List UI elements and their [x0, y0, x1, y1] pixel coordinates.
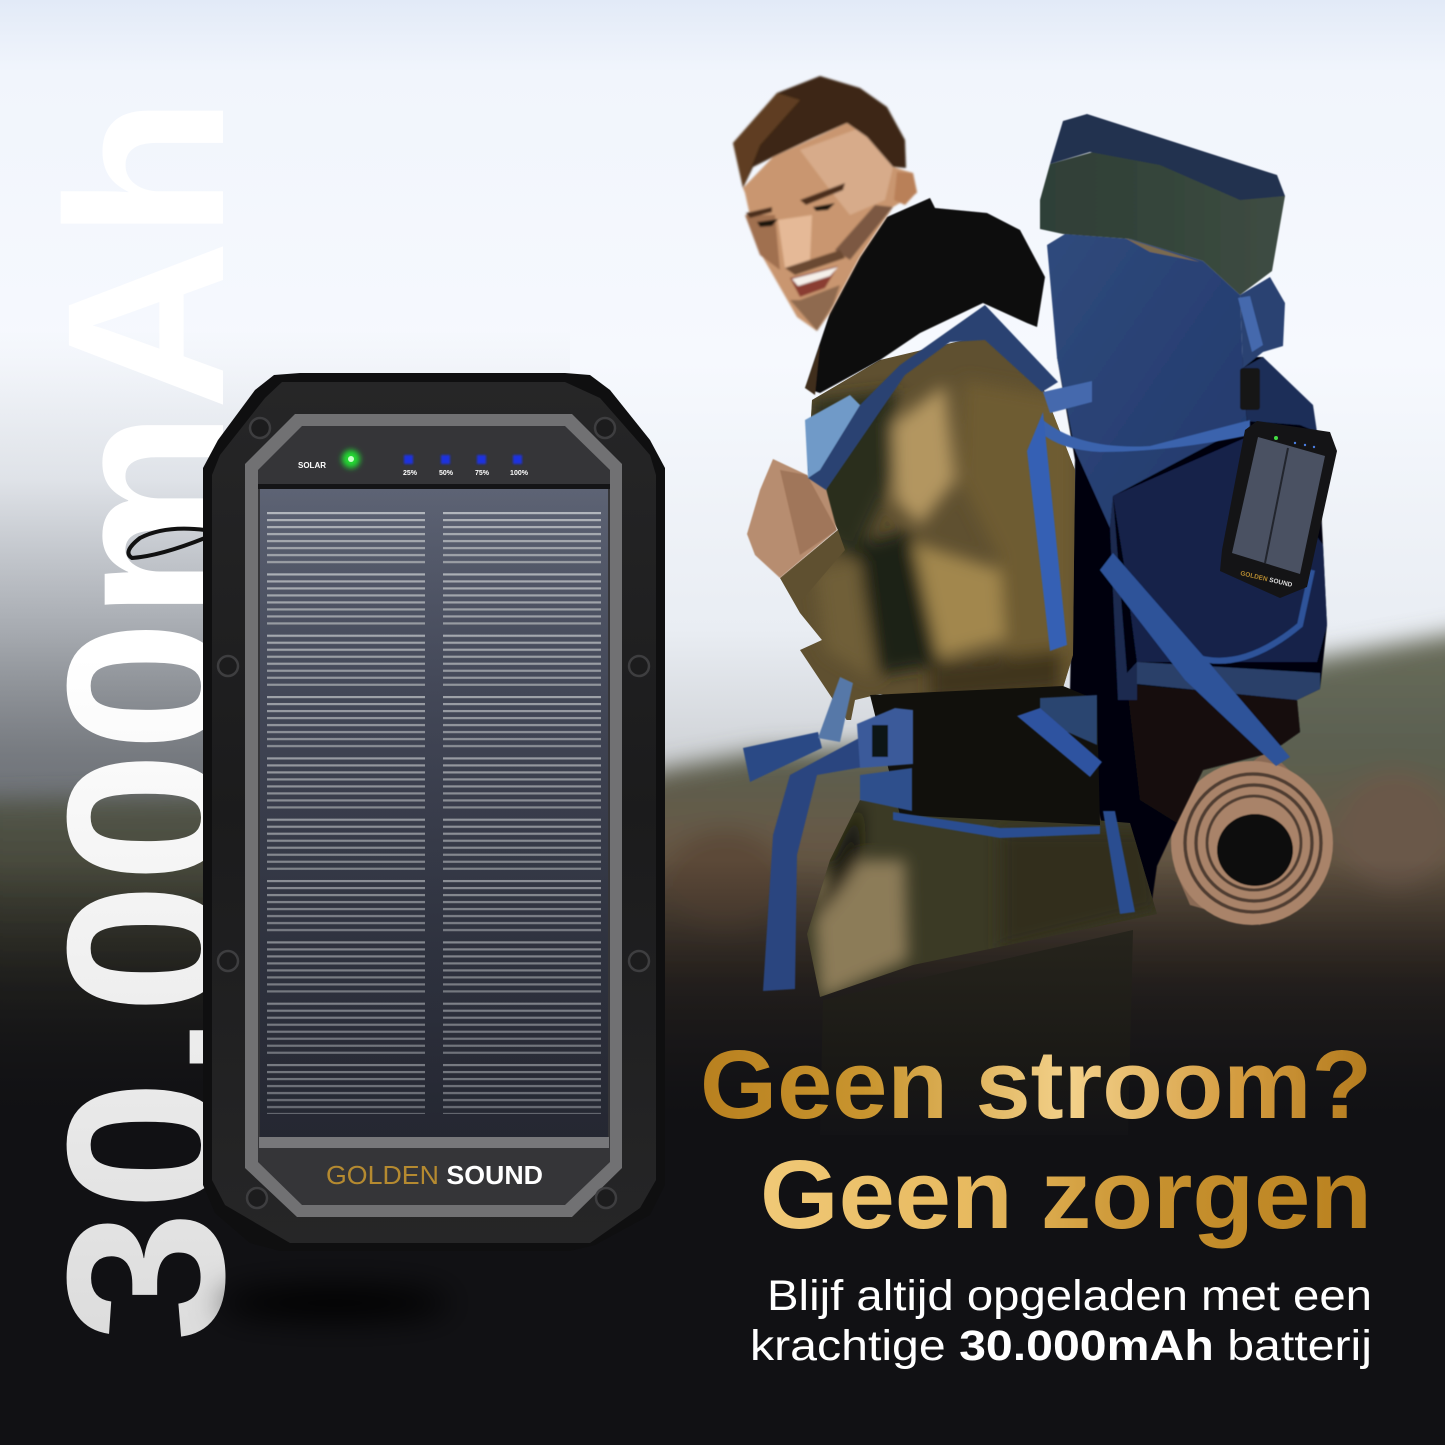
moustache: [785, 250, 845, 275]
buckle: [1238, 296, 1263, 352]
hand: [747, 459, 837, 578]
battery indicators: 50%: [439, 470, 454, 477]
mouth: [790, 266, 838, 297]
shoulder straps: [805, 305, 1250, 651]
big vertical capacity text: 30.000mAh: [21, 96, 271, 1342]
backpack lid green: [1040, 150, 1285, 295]
battery indicators: 100%: [510, 470, 529, 477]
headline: [700, 1030, 1372, 1249]
small power bank on backpack: GOLDEN SOUND: [1240, 570, 1293, 589]
battery indicators: [403, 455, 529, 477]
backpack brown bottom: [1127, 684, 1300, 823]
carabiner cable loop: [128, 529, 205, 558]
headline: Geen stroom?: [700, 1030, 1372, 1139]
backpack lower band: [1137, 662, 1320, 700]
rubber housing: [203, 373, 665, 1251]
shadow under power bank: [220, 1287, 450, 1319]
solar indicator: SOLAR: [298, 461, 326, 470]
backpack lid top band: [1050, 114, 1285, 200]
backpack side mesh: [1243, 357, 1317, 432]
small power bank on backpack: [1220, 421, 1337, 598]
solar power bank: [203, 373, 665, 1251]
top separator: [258, 484, 610, 489]
hair: [733, 76, 906, 188]
subheading: krachtige 30.000mAh batterij: [750, 1322, 1372, 1370]
compass tag: [1240, 368, 1260, 410]
hip belt: [743, 677, 1135, 991]
solar indicator: [298, 450, 360, 470]
solar darkening: [260, 489, 608, 1137]
brand name: GOLDEN SOUND: [326, 1160, 543, 1190]
battery indicators: 75%: [475, 470, 490, 477]
vertical jacket strap: [1027, 412, 1067, 651]
screws: [218, 418, 649, 1208]
strap curve: [1190, 570, 1312, 661]
jacket upper: [770, 330, 1090, 720]
backpack mesh pocket: [1113, 437, 1327, 662]
camo lining: [1125, 238, 1200, 262]
hiker with backpack: [733, 76, 1337, 1135]
backpack main panel: [1047, 234, 1247, 528]
grey frame: [245, 414, 622, 1217]
backpack: [1040, 114, 1327, 915]
backpack fold: [1240, 277, 1285, 368]
hood: [805, 198, 1045, 395]
waist dark area: [870, 686, 1100, 825]
pack shoulder buckle: [1043, 381, 1092, 413]
grey bar below solar cell: [259, 1137, 609, 1148]
chest-height strap: [1040, 420, 1250, 452]
head and face: [733, 76, 917, 331]
battery indicators: 25%: [403, 470, 418, 477]
subheading: [750, 1272, 1372, 1370]
solar cell: [260, 489, 608, 1137]
dark inner panel: [258, 426, 610, 1205]
rolled mat: [1171, 750, 1333, 925]
jacket lower: [807, 800, 1156, 997]
diagonal strap: [1100, 553, 1290, 766]
subheading: Blijf altijd opgeladen met een: [767, 1272, 1372, 1320]
solar cell strips: left: [267, 512, 425, 1114]
eyes and brows: [800, 183, 845, 205]
backpack dark silhouette: [1057, 357, 1327, 915]
solar cell strips: right: [443, 512, 601, 1114]
legs: [820, 930, 1133, 1135]
headline: Geen zorgen: [760, 1140, 1372, 1249]
